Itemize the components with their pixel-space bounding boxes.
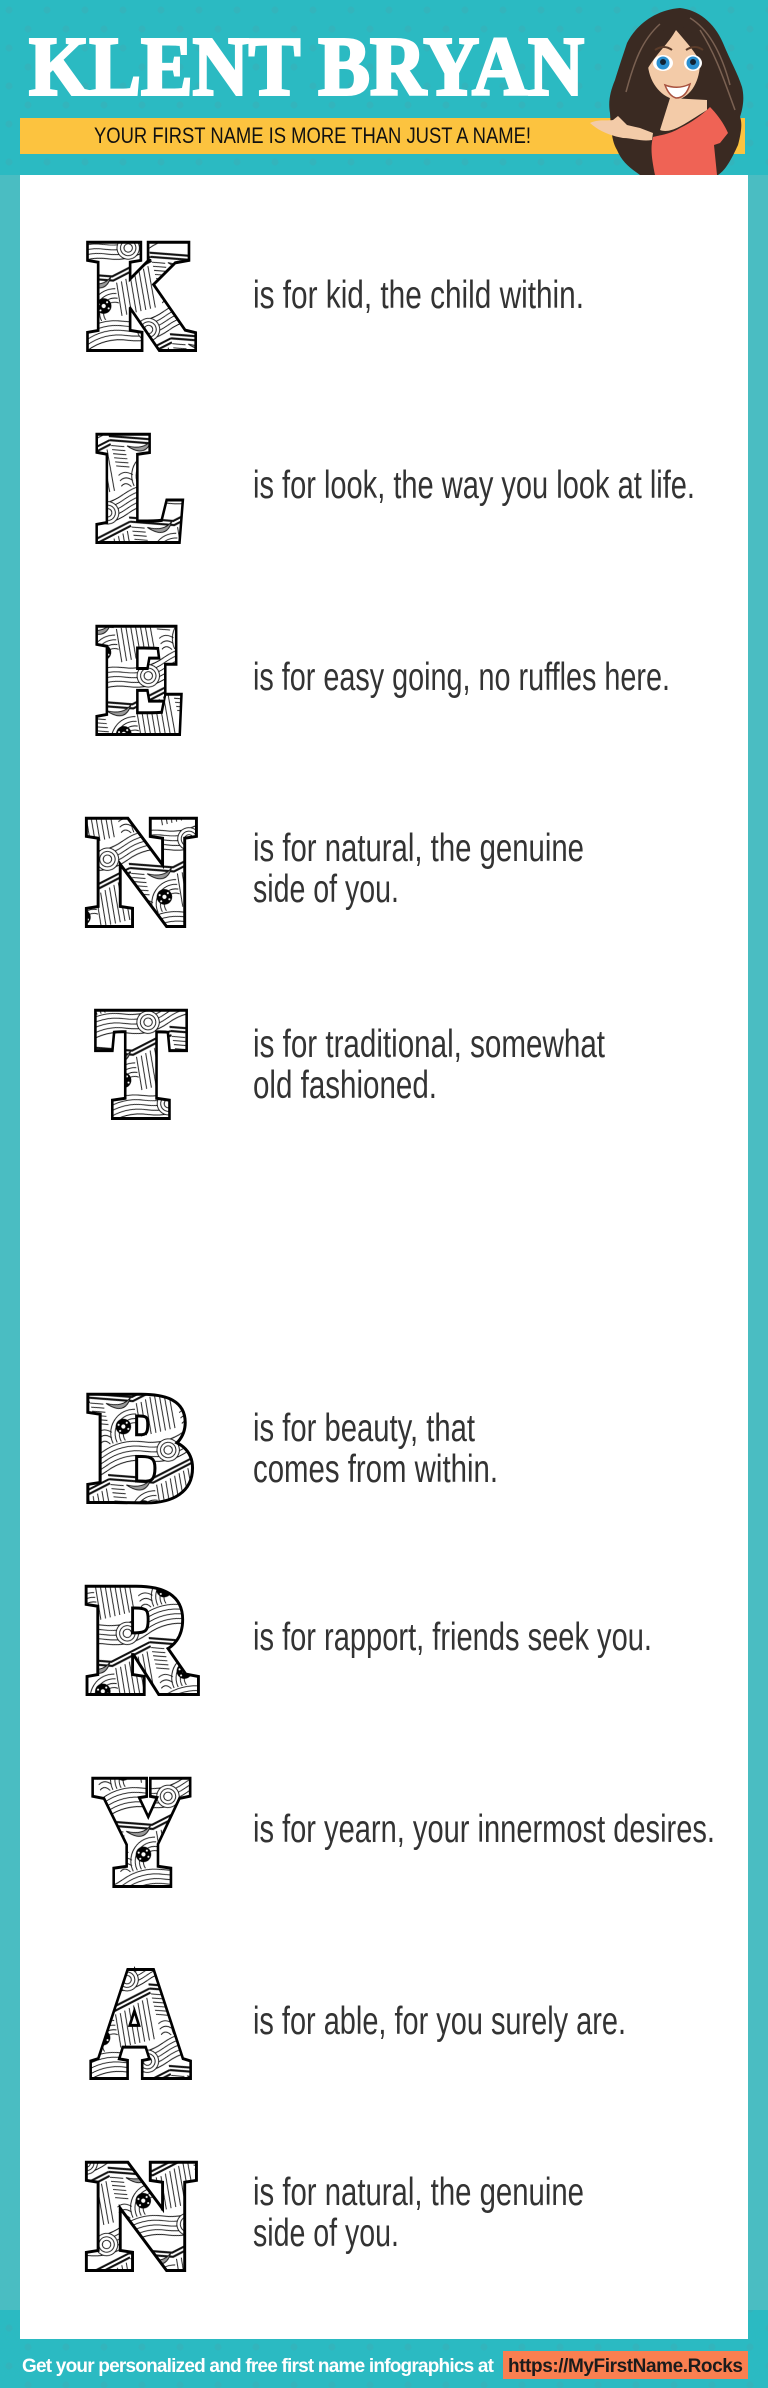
letter A: A bbox=[96, 1944, 186, 2104]
text N: side of you. bbox=[253, 868, 399, 911]
letter B: B bbox=[92, 1368, 190, 1528]
letter E: E bbox=[100, 600, 182, 760]
letter K: K bbox=[92, 216, 190, 376]
text N: is for natural, the genuine bbox=[253, 827, 584, 870]
text N bbox=[253, 2171, 584, 2255]
text B: comes from within. bbox=[253, 1448, 498, 1491]
letter Y: Y bbox=[96, 1752, 186, 1912]
text B bbox=[253, 1407, 498, 1491]
row: letter R bbox=[90, 1560, 652, 1720]
footer call to action: Get your personalized and free first name infographics at bbox=[22, 2356, 495, 2377]
letter A: A bbox=[96, 1944, 186, 2104]
row: letter B bbox=[92, 1368, 498, 1528]
text N: is for natural, the genuine bbox=[253, 2171, 584, 2214]
text A: is for able, for you surely are. bbox=[253, 2000, 626, 2043]
letter R: R bbox=[90, 1560, 192, 1720]
footer url badge: https://MyFirstName.Rocks bbox=[508, 2356, 743, 2377]
row: letter T bbox=[100, 984, 605, 1144]
row: letter N bbox=[90, 792, 584, 952]
text T: is for traditional, somewhat bbox=[253, 1023, 605, 1066]
illustration: smiling woman presenting bbox=[590, 8, 743, 175]
letter N: N bbox=[90, 2136, 192, 2296]
row: letter Y bbox=[96, 1752, 715, 1912]
text T bbox=[253, 1023, 605, 1107]
text T: old fashioned. bbox=[253, 1064, 437, 1107]
letter T: T bbox=[100, 984, 182, 1144]
letter N: N bbox=[90, 2136, 192, 2296]
letter R: R bbox=[90, 1560, 192, 1720]
text K: is for kid, the child within. bbox=[253, 274, 584, 317]
letter B: B bbox=[92, 1368, 190, 1528]
letter N: N bbox=[90, 792, 192, 952]
letter Y: Y bbox=[96, 1752, 186, 1912]
letter K: K bbox=[92, 216, 190, 376]
row: letter E bbox=[100, 600, 670, 760]
row: letter K bbox=[92, 216, 584, 376]
letter L: L bbox=[100, 408, 182, 568]
letter E: E bbox=[100, 600, 182, 760]
row: letter A bbox=[96, 1944, 626, 2104]
row: letter N (second) bbox=[90, 2136, 584, 2296]
text B: is for beauty, that bbox=[253, 1407, 475, 1450]
banner: tagline: YOUR FIRST NAME IS MORE THAN JUST A NAME! bbox=[94, 123, 531, 148]
title: KLENT BRYAN bbox=[29, 20, 584, 114]
letter N: N bbox=[90, 792, 192, 952]
letter L: L bbox=[100, 408, 182, 568]
text N: side of you. bbox=[253, 2212, 399, 2255]
letter T: T bbox=[100, 984, 182, 1144]
banner: tagline bbox=[20, 118, 745, 154]
text N bbox=[253, 827, 584, 911]
row: letter L bbox=[100, 408, 695, 568]
